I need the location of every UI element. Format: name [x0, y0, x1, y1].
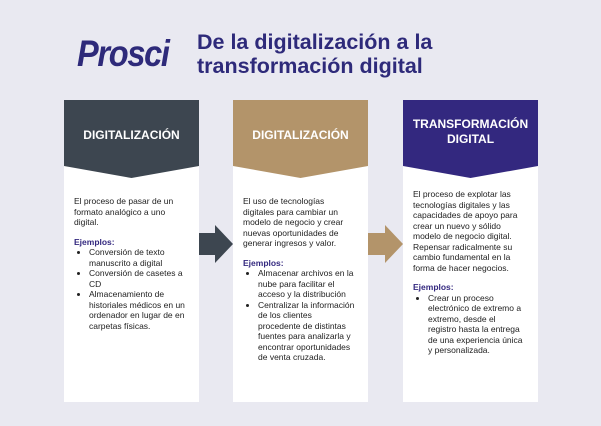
header: DIGITALIZACIÓN dark	[64, 100, 199, 178]
text block: description 3: Ejemplos:	[413, 282, 454, 292]
text block: description 2	[243, 196, 354, 362]
arrow: gold	[368, 225, 403, 263]
arrow: dark	[199, 225, 233, 263]
header: TRANSFORMACIÓN DIGITAL	[403, 100, 538, 178]
title: transformación digital	[197, 54, 423, 78]
header: TRANSFORMACIÓN DIGITAL: TRANSFORMACIÓN	[413, 117, 528, 131]
header: DIGITALIZACIÓN gold: DIGITALIZACIÓN	[252, 128, 349, 142]
text block: description 2: Almacenar archivos en la nube para facilitar el acceso y la distribución	[258, 268, 353, 299]
text block: description 3: Crear un proceso electrónico de extremo a extremo, desde el registro hasta la entrega de una experiencia única y personalizada.	[428, 292, 523, 355]
text block: description 2: Centralizar la información de los clientes procedente de distintas fuentes para analizarla y encontrar oportunidades de venta cruzada.	[258, 300, 354, 362]
panel: digitalización 2	[233, 100, 368, 402]
text block: description 1: El proceso de pasar de un formato analógico a uno digital.	[74, 196, 173, 227]
text block: description 3	[413, 189, 523, 355]
text block: description 1: Conversión de texto manuscrito a digital	[89, 247, 165, 268]
text block: description 1: Almacenamiento de historiales médicos en un ordenador en lugar de en carpetas físicas.	[89, 289, 185, 330]
text block: description 1: Ejemplos:	[74, 236, 115, 246]
text block: description 1	[74, 196, 185, 330]
header: DIGITALIZACIÓN gold	[233, 100, 368, 178]
text block: description 2: El uso de tecnologías digitales para cambiar un modelo de negocio y crear nuevas oportunidades de generar ingresos y valor.	[243, 196, 343, 248]
header: TRANSFORMACIÓN DIGITAL: DIGITAL	[447, 132, 494, 146]
panel: digitalización 1	[64, 100, 199, 402]
text block: description 3: El proceso de explotar las tecnologías digitales y las capacidades de apoyo para crear un nuevo y sólido modelo de negocio digital. Repensar radicalmente su cambio fundamental en la forma de hacer negocios.	[413, 189, 517, 272]
title	[197, 30, 432, 78]
panel: transformación digital	[403, 100, 538, 402]
text block: description 2: Ejemplos:	[243, 258, 284, 268]
header: DIGITALIZACIÓN dark: DIGITALIZACIÓN	[83, 128, 180, 142]
logo: Prosci: Prosci	[77, 33, 169, 74]
title: De la digitalización a la	[197, 30, 432, 54]
text block: description 1: Conversión de casetes a CD	[89, 268, 183, 288]
